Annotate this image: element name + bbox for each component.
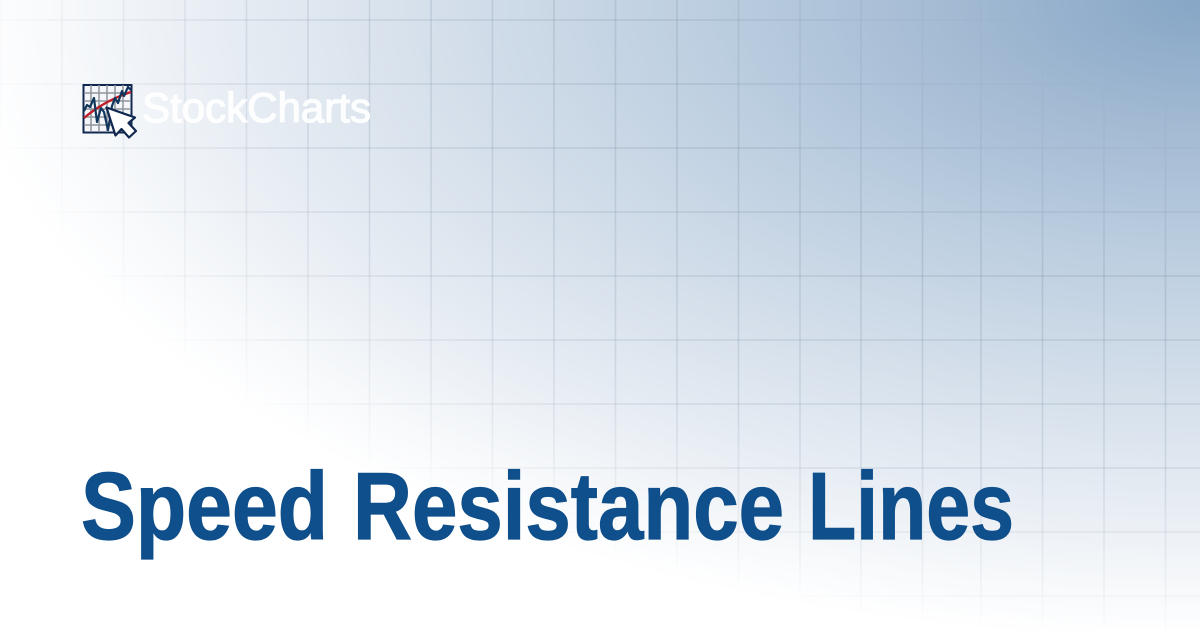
wordmark: StockCharts <box>142 84 371 131</box>
title <box>81 453 1014 560</box>
logo: StockCharts <box>84 84 371 138</box>
title: Lines <box>808 453 1014 560</box>
title: Speed <box>81 453 328 560</box>
title: Resistance <box>353 453 784 560</box>
icon: chart with cursor <box>84 85 136 138</box>
